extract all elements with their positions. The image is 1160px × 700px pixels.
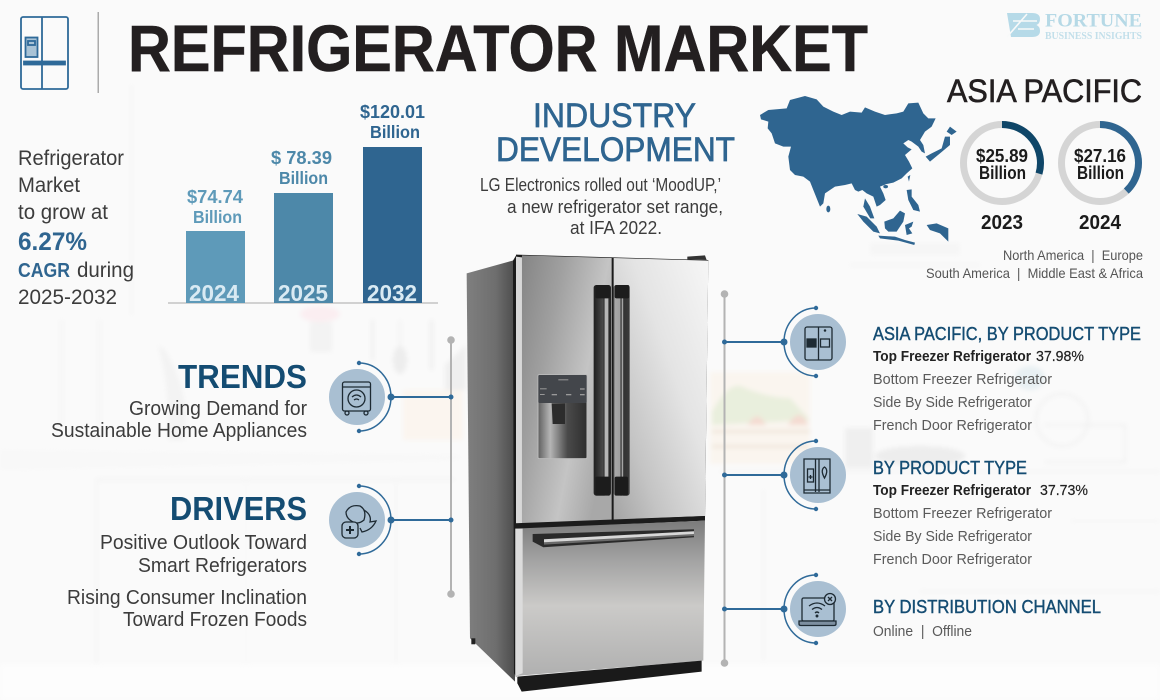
- panel: industry development: a new refrigerator set range,: [507, 197, 723, 217]
- text: market growth summary: to grow at: [18, 201, 108, 224]
- icon: smart washer: [329, 369, 385, 425]
- icon: frozen food: [329, 492, 385, 548]
- donut chart: 2023: 2023: [981, 212, 1023, 234]
- text: by product type: 37.73%: [1040, 482, 1088, 499]
- text: by distribution channel: Online | Offline: [873, 623, 972, 640]
- text: by distribution channel: BY DISTRIBUTION CHANNEL: [873, 597, 1101, 617]
- text: market growth summary: Refrigerator: [18, 147, 124, 170]
- text: other regions: South America | Middle East & Africa: [926, 265, 1143, 281]
- bar 2024: 2024: [189, 280, 239, 306]
- door handles: [594, 285, 630, 496]
- text: market growth summary: [18, 147, 134, 309]
- text: Asia Pacific by product type: [873, 324, 1141, 434]
- icon: French door refrigerator: [790, 447, 846, 503]
- text: by distribution channel: [873, 597, 1101, 640]
- donut chart: 2024: $27.16: [1074, 146, 1126, 166]
- donut chart: 2023: Billion: [979, 163, 1026, 183]
- panel: industry development: LG Electronics rolled out ‘MoodUP,’: [480, 175, 721, 195]
- dispenser: [538, 375, 587, 459]
- panel: industry development: DEVELOPMENT: [496, 131, 735, 169]
- drivers connector: [357, 484, 454, 556]
- connector 3: [722, 573, 818, 645]
- bar 2032: 2032: [367, 280, 417, 306]
- trends connector: [357, 361, 454, 433]
- bar 2024: Billion: [193, 207, 242, 227]
- text: trends: TRENDS: [178, 358, 307, 395]
- icon: refrigerator outline: [21, 17, 68, 89]
- donut chart: 2024: 2024: [1079, 212, 1122, 234]
- text: trends: Sustainable Home Appliances: [51, 420, 307, 442]
- freezer handle: [533, 529, 694, 547]
- logo: Fortune Business Insights: BUSINESS INSIGHTS: [1045, 31, 1142, 42]
- map: Asia Pacific: [760, 96, 957, 245]
- text: market growth summary: 2025-2032: [18, 286, 117, 309]
- bar 2025: $ 78.39: [271, 148, 332, 168]
- right timeline: [721, 290, 818, 667]
- title: REFRIGERATOR MARKET: [128, 11, 868, 85]
- logo: Fortune Business Insights: FORTUNE: [1045, 10, 1142, 32]
- text: by product type: French Door Refrigerator: [873, 551, 1032, 568]
- text: market growth summary: CAGR: [18, 260, 70, 282]
- bar 2024: $74.74: [187, 187, 243, 207]
- text: Asia Pacific by product type: 37.98%: [1036, 348, 1084, 365]
- bar chart: market size: [168, 102, 438, 306]
- text: by product type: [873, 458, 1088, 568]
- text: trends: [51, 358, 307, 442]
- text: Asia Pacific by product type: ASIA PACIFIC, BY PRODUCT TYPE: [873, 324, 1141, 344]
- panel: industry development: [480, 97, 735, 238]
- text: market growth summary: 6.27%: [18, 228, 87, 256]
- bar 2024: [186, 187, 245, 306]
- donut chart: 2023: $25.89: [976, 146, 1028, 166]
- text: drivers: Rising Consumer Inclination: [67, 587, 307, 609]
- bar 2032: [360, 102, 425, 306]
- text: Asia Pacific by product type: Side By Side Refrigerator: [873, 394, 1032, 411]
- bar 2032: Billion: [370, 122, 420, 142]
- text: trends: Growing Demand for: [129, 398, 307, 420]
- text: drivers: [67, 490, 307, 631]
- heading: Asia Pacific: ASIA PACIFIC: [947, 73, 1142, 109]
- text: Asia Pacific by product type: Bottom Freezer Refrigerator: [873, 371, 1052, 388]
- donut chart: 2024: [1062, 124, 1138, 234]
- text: market growth summary: Market: [18, 174, 80, 197]
- refrigerator illustration: [467, 255, 708, 692]
- icon: laptop with wifi: [790, 581, 846, 637]
- text: drivers: Toward Frozen Foods: [123, 609, 307, 631]
- connector 1: [722, 306, 818, 378]
- text: drivers: Smart Refrigerators: [138, 555, 307, 577]
- bar 2025: 2025: [278, 280, 328, 306]
- donut chart: 2024: Billion: [1077, 163, 1124, 183]
- text: market growth summary: during: [77, 259, 134, 282]
- panel: industry development: at IFA 2022.: [570, 218, 662, 238]
- logo: Fortune Business Insights: [1007, 10, 1142, 42]
- text: Asia Pacific by product type: Top Freezer Refrigerator: [873, 348, 1031, 365]
- icon: side by side refrigerator: [790, 314, 846, 370]
- text: by product type: Bottom Freezer Refrigerator: [873, 505, 1052, 522]
- left timeline: [357, 336, 455, 598]
- text: by product type: BY PRODUCT TYPE: [873, 458, 1027, 478]
- text: by product type: Top Freezer Refrigerator: [873, 482, 1031, 499]
- text: drivers: Positive Outlook Toward: [100, 532, 307, 554]
- text: other regions: [926, 247, 1143, 281]
- text: other regions: North America | Europe: [1003, 247, 1143, 263]
- donut chart: 2023: [964, 124, 1040, 234]
- divider: [98, 12, 99, 93]
- text: Asia Pacific by product type: French Door Refrigerator: [873, 417, 1032, 434]
- connector 2: [722, 439, 818, 511]
- bar 2025: [271, 148, 333, 306]
- bar 2032: $120.01: [360, 102, 425, 122]
- text: by product type: Side By Side Refrigerator: [873, 528, 1032, 545]
- text: drivers: DRIVERS: [170, 490, 307, 527]
- bar 2025: Billion: [279, 168, 328, 188]
- panel: industry development: INDUSTRY: [533, 97, 696, 135]
